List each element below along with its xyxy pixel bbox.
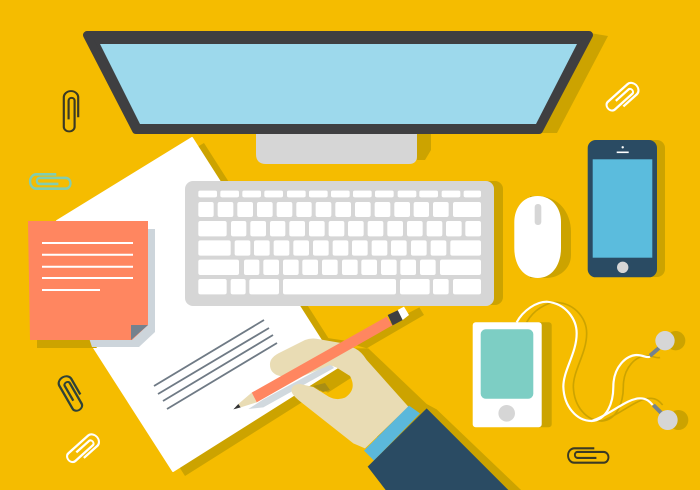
paper sheet with shadow xyxy=(40,138,350,476)
inner hand shadow xyxy=(313,383,330,392)
shirt cuff xyxy=(364,406,420,461)
pencil shadow strip xyxy=(248,363,334,409)
hand xyxy=(270,338,408,448)
keyboard xyxy=(185,181,503,306)
earphones cord shadow xyxy=(527,302,688,430)
paper text lines xyxy=(154,320,277,409)
smartphone xyxy=(588,140,665,277)
paperclip: teal left xyxy=(30,174,70,189)
monitor screen xyxy=(100,44,577,124)
player screen xyxy=(481,329,533,399)
phone home button xyxy=(617,262,628,273)
phone screen xyxy=(593,159,652,258)
keys xyxy=(198,191,481,294)
phone speaker xyxy=(617,146,629,153)
paperclip: white lower left xyxy=(65,432,102,467)
earbud bottom xyxy=(653,405,678,430)
paperclip: dark bottom xyxy=(568,448,608,463)
paperclip: white top right xyxy=(605,80,641,115)
mouse scroll wheel xyxy=(535,204,541,225)
paperclip: dark top left xyxy=(64,91,78,131)
earphone cord xyxy=(517,302,653,421)
mouse xyxy=(514,196,571,278)
paperclip: dark lower left xyxy=(56,374,87,412)
monitor stand xyxy=(256,133,431,164)
player button xyxy=(498,405,515,422)
hand, pencil and sleeve shadows xyxy=(313,307,535,490)
hand holding pencil xyxy=(233,307,535,490)
sticky note lines xyxy=(42,243,133,290)
sticky note xyxy=(28,221,155,348)
earbud top xyxy=(650,331,675,356)
jacket sleeve xyxy=(368,408,518,490)
pencil xyxy=(233,307,409,409)
earphones xyxy=(517,302,678,430)
music player xyxy=(473,322,552,427)
monitor xyxy=(87,33,608,133)
